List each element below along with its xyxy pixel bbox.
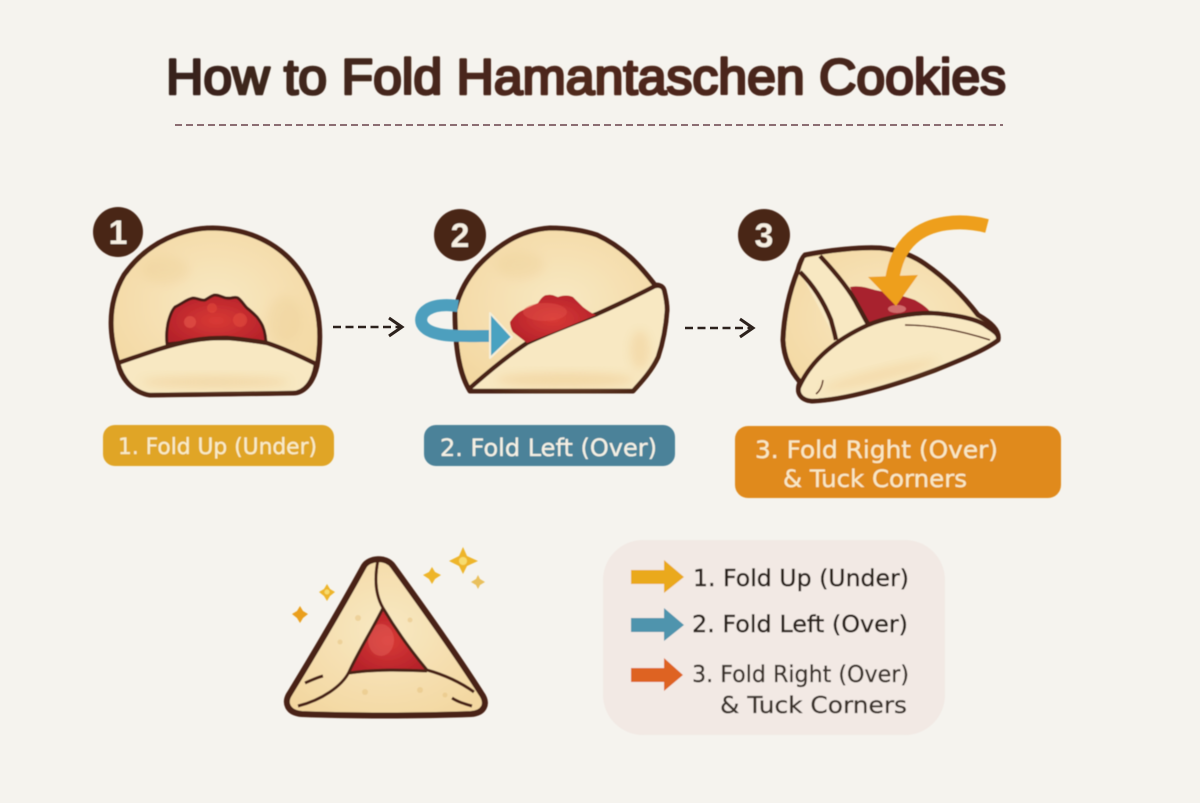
step 1 label (103, 425, 334, 466)
legend row 1 (631, 560, 909, 593)
step 1 cookie (111, 228, 320, 395)
jam filling (510, 295, 596, 343)
step 2 number badge (434, 209, 486, 261)
jam window (349, 608, 427, 673)
step 1 number badge: 1 (109, 214, 127, 252)
step 3 cookie (783, 248, 998, 401)
jam filling (850, 286, 931, 326)
panel: step 3 (735, 209, 1061, 498)
step 3 label: & Tuck Corners (783, 465, 967, 493)
step 3 number badge: 3 (755, 217, 773, 255)
icon: sparkles (292, 547, 485, 623)
step 3 label: 3. Fold Right (Over) (755, 436, 998, 464)
icon: orange tuck arrow (868, 222, 987, 306)
dough speckles (338, 615, 448, 698)
legend row 2 (631, 608, 908, 641)
fold lines (298, 560, 474, 706)
step 1 number badge (93, 207, 143, 257)
jam filling (167, 295, 266, 346)
finished cookie (287, 559, 485, 716)
step 2 number badge: 2 (451, 217, 469, 255)
legend row 3: & Tuck Corners (720, 693, 907, 719)
legend row 1: 1. Fold Up (Under) (693, 566, 909, 592)
panel: legend (603, 540, 945, 735)
panel: step 2 (421, 209, 675, 466)
legend row 2: 2. Fold Left (Over) (692, 612, 908, 638)
step 3 label (735, 426, 1061, 498)
arrow: step 2 to 3 (685, 319, 753, 337)
title: How to Fold Hamantaschen Cookies (166, 49, 1006, 105)
fold lines (800, 256, 868, 340)
step 2 label: 2. Fold Left (Over) (440, 434, 657, 462)
legend row 3: 3. Fold Right (Over) (692, 662, 909, 688)
bottom fold flap (118, 338, 316, 395)
step 2 cookie (455, 228, 667, 391)
left fold flap (470, 286, 667, 391)
step 2 label (424, 425, 675, 466)
front fold flap (798, 313, 998, 401)
icon: blue rotate arrow (421, 305, 512, 358)
panel: step 1 (93, 207, 334, 466)
left fold flap (800, 256, 868, 340)
cookie body (287, 559, 485, 716)
legend row 3 (631, 658, 909, 719)
step 1 label: 1. Fold Up (Under) (118, 435, 317, 460)
step 3 number badge (738, 209, 790, 261)
arrow: step 1 to 2 (333, 318, 402, 336)
